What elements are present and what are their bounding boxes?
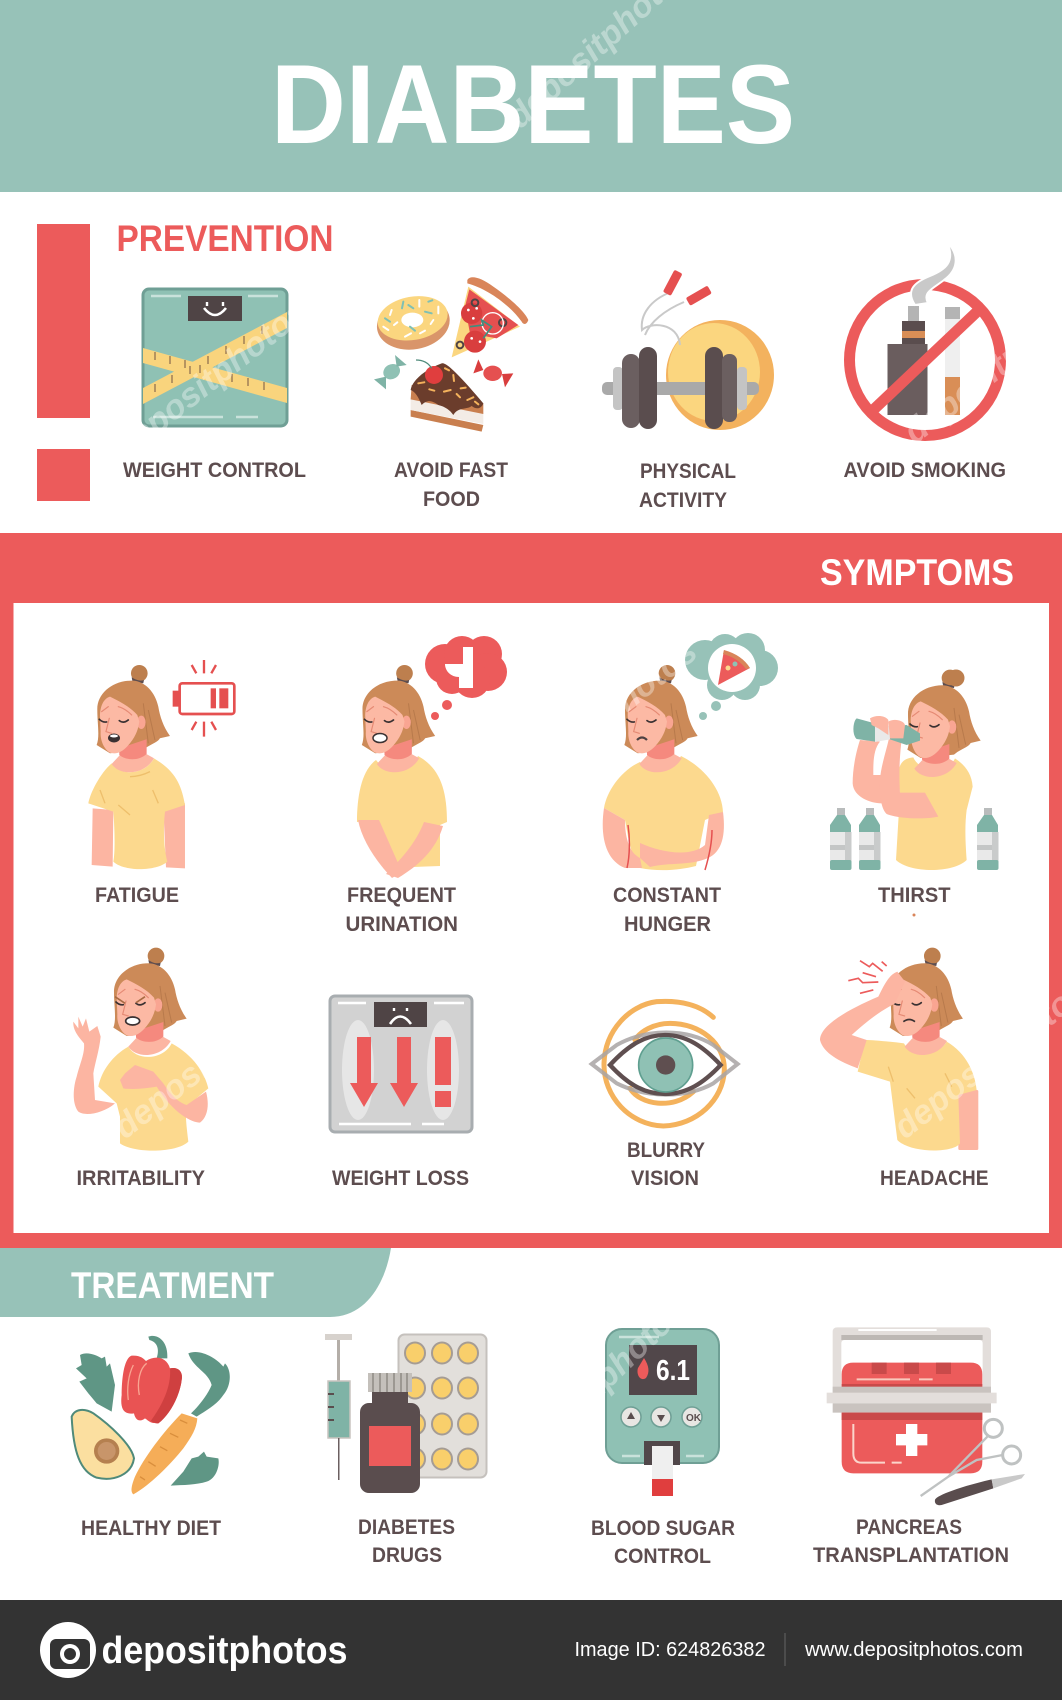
website: www.depositphotos.com <box>804 1639 1023 1661</box>
icon: water bottles <box>830 808 998 870</box>
heading tab: treatment: TREATMENT <box>71 1265 274 1306</box>
label: blurry vision <box>627 1139 705 1190</box>
icon: healthy food <box>72 1336 230 1494</box>
icon: diabetes drugs <box>325 1334 486 1493</box>
icon: exclamation mark <box>37 224 90 501</box>
icon: blurry eye <box>592 1001 738 1126</box>
watermarks: depositphotos <box>497 632 704 806</box>
watermarks <box>107 277 1062 1481</box>
icon: organ transport cooler and surgical tools <box>827 1327 1025 1505</box>
icon: glucose meter <box>606 1329 719 1496</box>
label: blurry vision: BLURRY <box>627 1139 705 1162</box>
icon: low battery <box>173 660 234 737</box>
label: avoid smoking: AVOID SMOKING <box>844 459 1006 482</box>
label: pancreas transplantation <box>813 1516 1009 1567</box>
label: thirst: THIRST <box>878 884 951 907</box>
watermarks: depositphotos <box>107 972 314 1146</box>
figure: thirst <box>830 670 998 870</box>
label: pancreas transplantation: TRANSPLANTATION <box>813 1544 1009 1567</box>
label: weight loss: WEIGHT LOSS <box>332 1167 469 1190</box>
heading: prevention: PREVENTION <box>116 218 334 259</box>
label: healthy diet: HEALTHY DIET <box>81 1517 221 1540</box>
footer bar <box>0 1600 1062 1700</box>
figure: fatigue <box>88 660 234 869</box>
syringe <box>325 1334 352 1480</box>
panel: treatment <box>0 1248 1025 1568</box>
label: pancreas transplantation: PANCREAS <box>856 1516 962 1539</box>
label: constant hunger: CONSTANT <box>613 884 721 907</box>
label: frequent urination: FREQUENT <box>347 884 456 907</box>
figure: irritability <box>73 948 208 1151</box>
label: avoid fast food: AVOID FAST <box>394 459 508 482</box>
heading: symptoms: SYMPTOMS <box>820 552 1014 593</box>
figure: constant hunger <box>603 633 778 870</box>
icon: glucose meter: OK <box>686 1413 702 1424</box>
label: fatigue: FATIGUE <box>95 884 179 907</box>
label: blood sugar control <box>591 1517 735 1568</box>
label: diabetes drugs <box>358 1516 455 1567</box>
label: headache: HEADACHE <box>880 1167 988 1190</box>
label: irritability: IRRITABILITY <box>76 1167 205 1190</box>
title: DIABETES <box>271 42 795 167</box>
header banner <box>0 0 1062 192</box>
blister pack <box>398 1334 486 1478</box>
icon: depositphotos logo <box>40 1622 96 1678</box>
label: constant hunger: HUNGER <box>624 913 711 936</box>
icon: no smoking <box>850 242 1000 436</box>
medicine bottle <box>360 1373 420 1493</box>
label: avoid fast food: FOOD <box>423 488 480 511</box>
label: frequent urination <box>346 884 458 936</box>
brand name: depositphotos <box>102 1630 348 1672</box>
label: diabetes drugs: DRUGS <box>372 1544 442 1567</box>
figure: headache <box>820 948 978 1150</box>
label: diabetes drugs: DIABETES <box>358 1516 455 1539</box>
image id: Image ID: 624826382 <box>574 1639 766 1661</box>
label: blood sugar control: CONTROL <box>614 1545 711 1568</box>
heading tab: treatment <box>0 1248 391 1317</box>
label: avoid fast food <box>394 459 508 511</box>
label: weight control: WEIGHT CONTROL <box>123 459 306 482</box>
panel: symptoms <box>0 533 1062 1248</box>
label: frequent urination: URINATION <box>346 913 458 936</box>
watermarks: depositphotos <box>107 292 314 466</box>
icon: pizza thought bubble <box>685 633 778 720</box>
icon: glucose meter: 6.1 <box>656 1355 690 1387</box>
icon: toilet thought bubble <box>425 636 507 720</box>
watermarks: depositphotos <box>499 1291 694 1481</box>
icon: fast food <box>373 277 528 432</box>
label: blood sugar control: BLOOD SUGAR <box>591 1517 735 1540</box>
icon: dumbbell and jump rope <box>602 270 774 430</box>
figure: frequent urination <box>357 636 507 878</box>
icon: weighing scale with tape <box>143 289 287 426</box>
icon: weight loss scale <box>330 996 472 1132</box>
label: physical activity: ACTIVITY <box>639 489 727 512</box>
label: physical activity: PHYSICAL <box>640 460 736 483</box>
label: constant hunger <box>613 884 721 936</box>
label: physical activity <box>639 460 736 512</box>
label: blurry vision: VISION <box>631 1167 699 1190</box>
panel: prevention <box>37 218 1006 512</box>
